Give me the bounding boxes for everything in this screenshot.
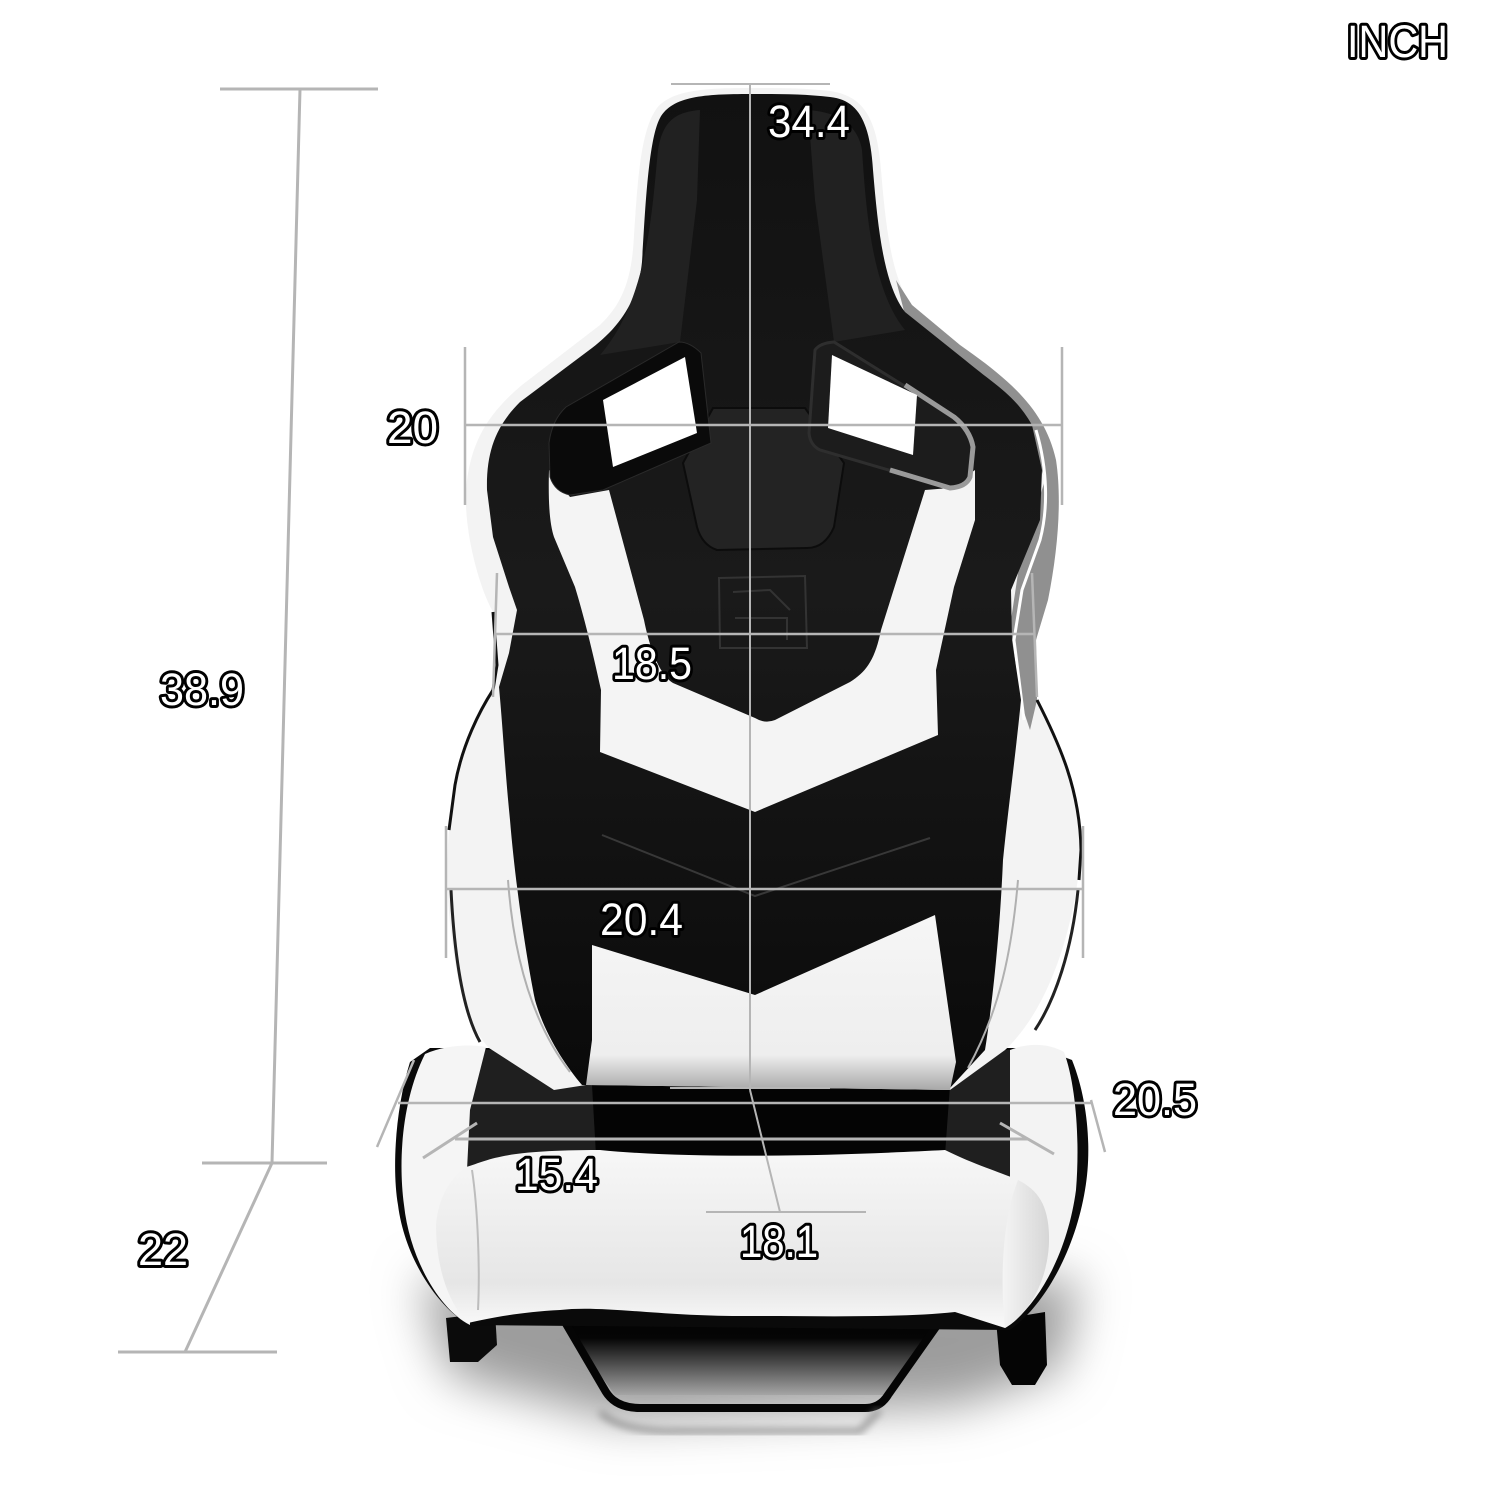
right edge highlight [1014,430,1046,720]
label: 20: 20 [387,402,438,453]
left outline [449,612,497,830]
upper white chevron panel [549,470,975,812]
seat frame and rails [446,1300,1047,1431]
cushion left seam [472,1170,479,1310]
base inner width dimension [423,1123,1054,1158]
logo emboss [719,576,807,648]
backrest shell [447,88,1081,1090]
head cushion panel [683,408,844,550]
base shell [395,1048,1088,1330]
seat base [402,1045,1078,1328]
right bolster seam [968,880,1018,1068]
label: 18.1: 18.1 [740,1216,818,1267]
hip width dimension [446,826,1083,958]
right belt opening frame [809,342,973,488]
floor shadow [420,1280,1080,1420]
seat pan centre [592,1085,950,1155]
black upholstery [487,94,1042,1088]
waist width dimension [493,573,1037,697]
label: 18.5: 18.5 [612,638,692,689]
chevron seams [602,835,930,896]
left side bolster [402,1045,486,1325]
cushion right end cap [1003,1180,1049,1328]
left belt opening [603,357,697,467]
head side panels [600,110,700,355]
lower white panel [586,915,956,1090]
base outer width dimension [377,1060,1105,1152]
seat backrest [447,88,1081,1090]
dimension lines [118,84,1105,1352]
dimension labels [138,16,1448,1275]
label: 22: 22 [138,1224,188,1275]
left bolster seam [508,880,570,1072]
lower right outline [1035,890,1078,1030]
lower left outline [451,890,480,1042]
label: 15.4: 15.4 [515,1149,598,1200]
shoulder width dimension [465,347,1062,505]
label: 20.4: 20.4 [600,894,683,945]
right side bolster [1005,1045,1078,1328]
right edge shading [896,280,1059,730]
label: 38.9: 38.9 [160,664,244,715]
backrest height dimension [670,84,830,1090]
left belt opening frame [549,342,711,495]
height dimension [202,89,378,1163]
depth dimension [118,1163,277,1352]
seat cushion [436,1150,1049,1328]
right outline [1037,700,1081,880]
label: 20.5: 20.5 [1113,1074,1197,1125]
cushion length dimension [706,1090,866,1212]
right frame highlight [890,385,973,488]
seat pan side areas [465,1050,1018,1180]
right belt opening [828,355,917,455]
label: 34.4: 34.4 [768,96,850,147]
unit label: INCH [1347,16,1448,67]
